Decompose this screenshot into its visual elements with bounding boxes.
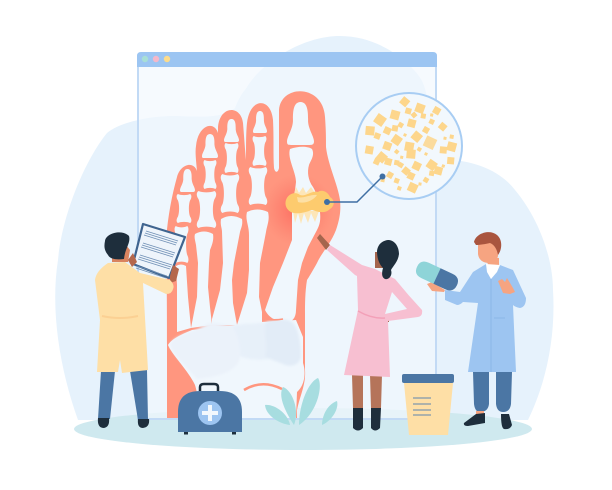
left doctor hands <box>128 253 179 283</box>
crystal particles <box>365 96 457 194</box>
doctor with clipboard <box>95 224 185 428</box>
magnified crystals circle <box>356 93 462 199</box>
right doctor shoes <box>464 413 512 429</box>
window buttons <box>142 56 170 62</box>
right doctor hair <box>474 232 501 255</box>
bag cross badge <box>198 401 222 425</box>
right doctor neck <box>486 258 499 278</box>
woman hands <box>317 234 389 322</box>
right doctor face <box>478 241 498 263</box>
male doctor with pill <box>413 232 526 429</box>
woman legs <box>352 375 382 408</box>
inflammation glow <box>272 184 324 236</box>
toe bones <box>175 102 318 263</box>
woman neck <box>375 252 384 268</box>
background blob <box>55 36 553 420</box>
left doctor shoes <box>98 418 149 428</box>
browser window panel <box>137 52 437 419</box>
left doctor trousers <box>98 370 148 420</box>
right doctor trousers <box>473 372 512 412</box>
right doctor shirt <box>486 264 500 279</box>
right doctor coat <box>445 264 526 372</box>
dress belt <box>358 311 385 318</box>
foot outline <box>166 91 340 418</box>
plant <box>265 378 337 425</box>
clipboard <box>133 224 185 278</box>
left doctor belt <box>102 316 138 318</box>
metatarsal bones <box>176 210 320 332</box>
coat details <box>491 279 505 372</box>
heel arc <box>244 384 282 390</box>
bag handle <box>200 384 218 391</box>
right doctor ankles <box>476 411 484 414</box>
woman boots <box>353 408 381 430</box>
tarsal bones <box>168 318 305 418</box>
window title bar <box>137 52 437 67</box>
illustration: gout foot diagnosis <box>55 36 554 450</box>
left doctor coat <box>95 262 174 373</box>
specimen jar <box>402 374 454 435</box>
pink dress <box>327 245 422 377</box>
left doctor hair <box>104 232 129 259</box>
jar measure lines <box>413 398 431 415</box>
bunion crystal deposit <box>285 187 334 224</box>
left doctor face <box>112 245 130 262</box>
ground ellipse <box>74 408 532 450</box>
right doctor hands <box>427 278 515 294</box>
woman hair <box>377 240 399 279</box>
callout leader line <box>324 174 386 205</box>
foot x-ray <box>166 91 345 418</box>
pill capsule <box>413 259 461 293</box>
medical bag <box>178 384 242 434</box>
woman in pink dress <box>317 234 422 430</box>
